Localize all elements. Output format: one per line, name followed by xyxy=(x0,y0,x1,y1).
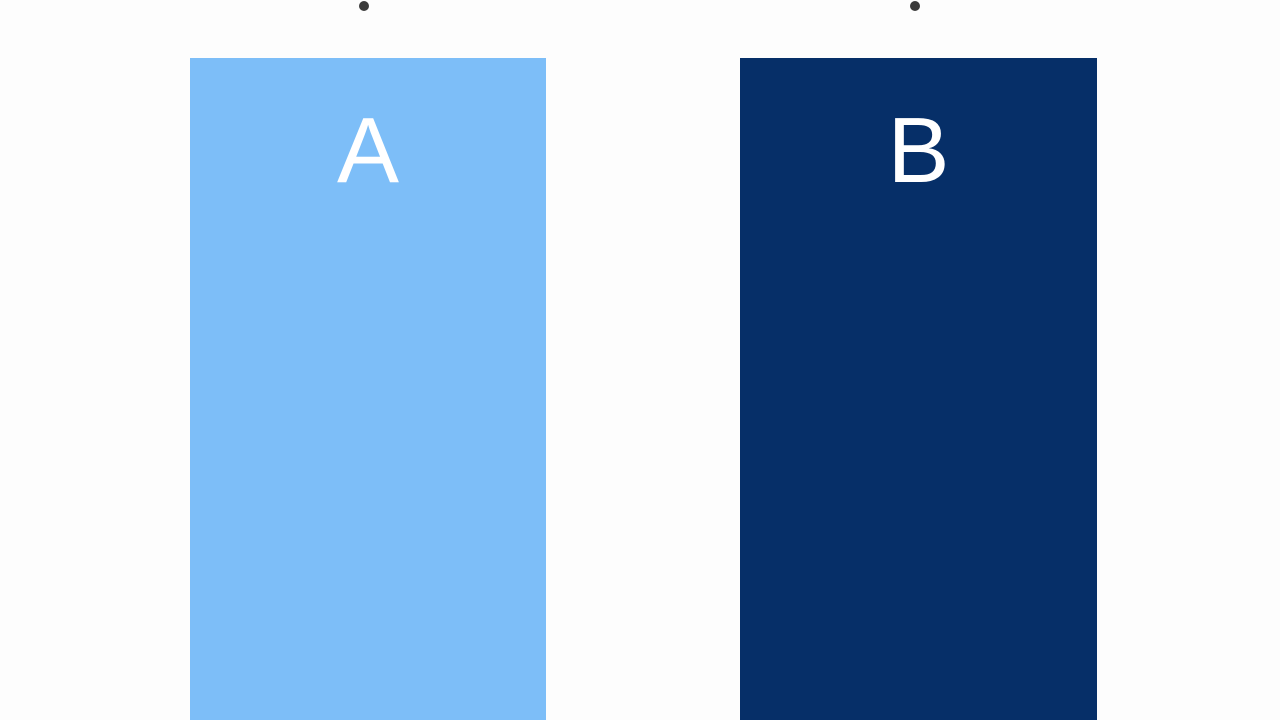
label A: A xyxy=(337,98,399,202)
marker dot B xyxy=(910,1,920,11)
label B: B xyxy=(887,98,950,202)
bar A xyxy=(190,58,546,720)
marker dot A xyxy=(359,1,369,11)
bar B xyxy=(740,58,1097,720)
